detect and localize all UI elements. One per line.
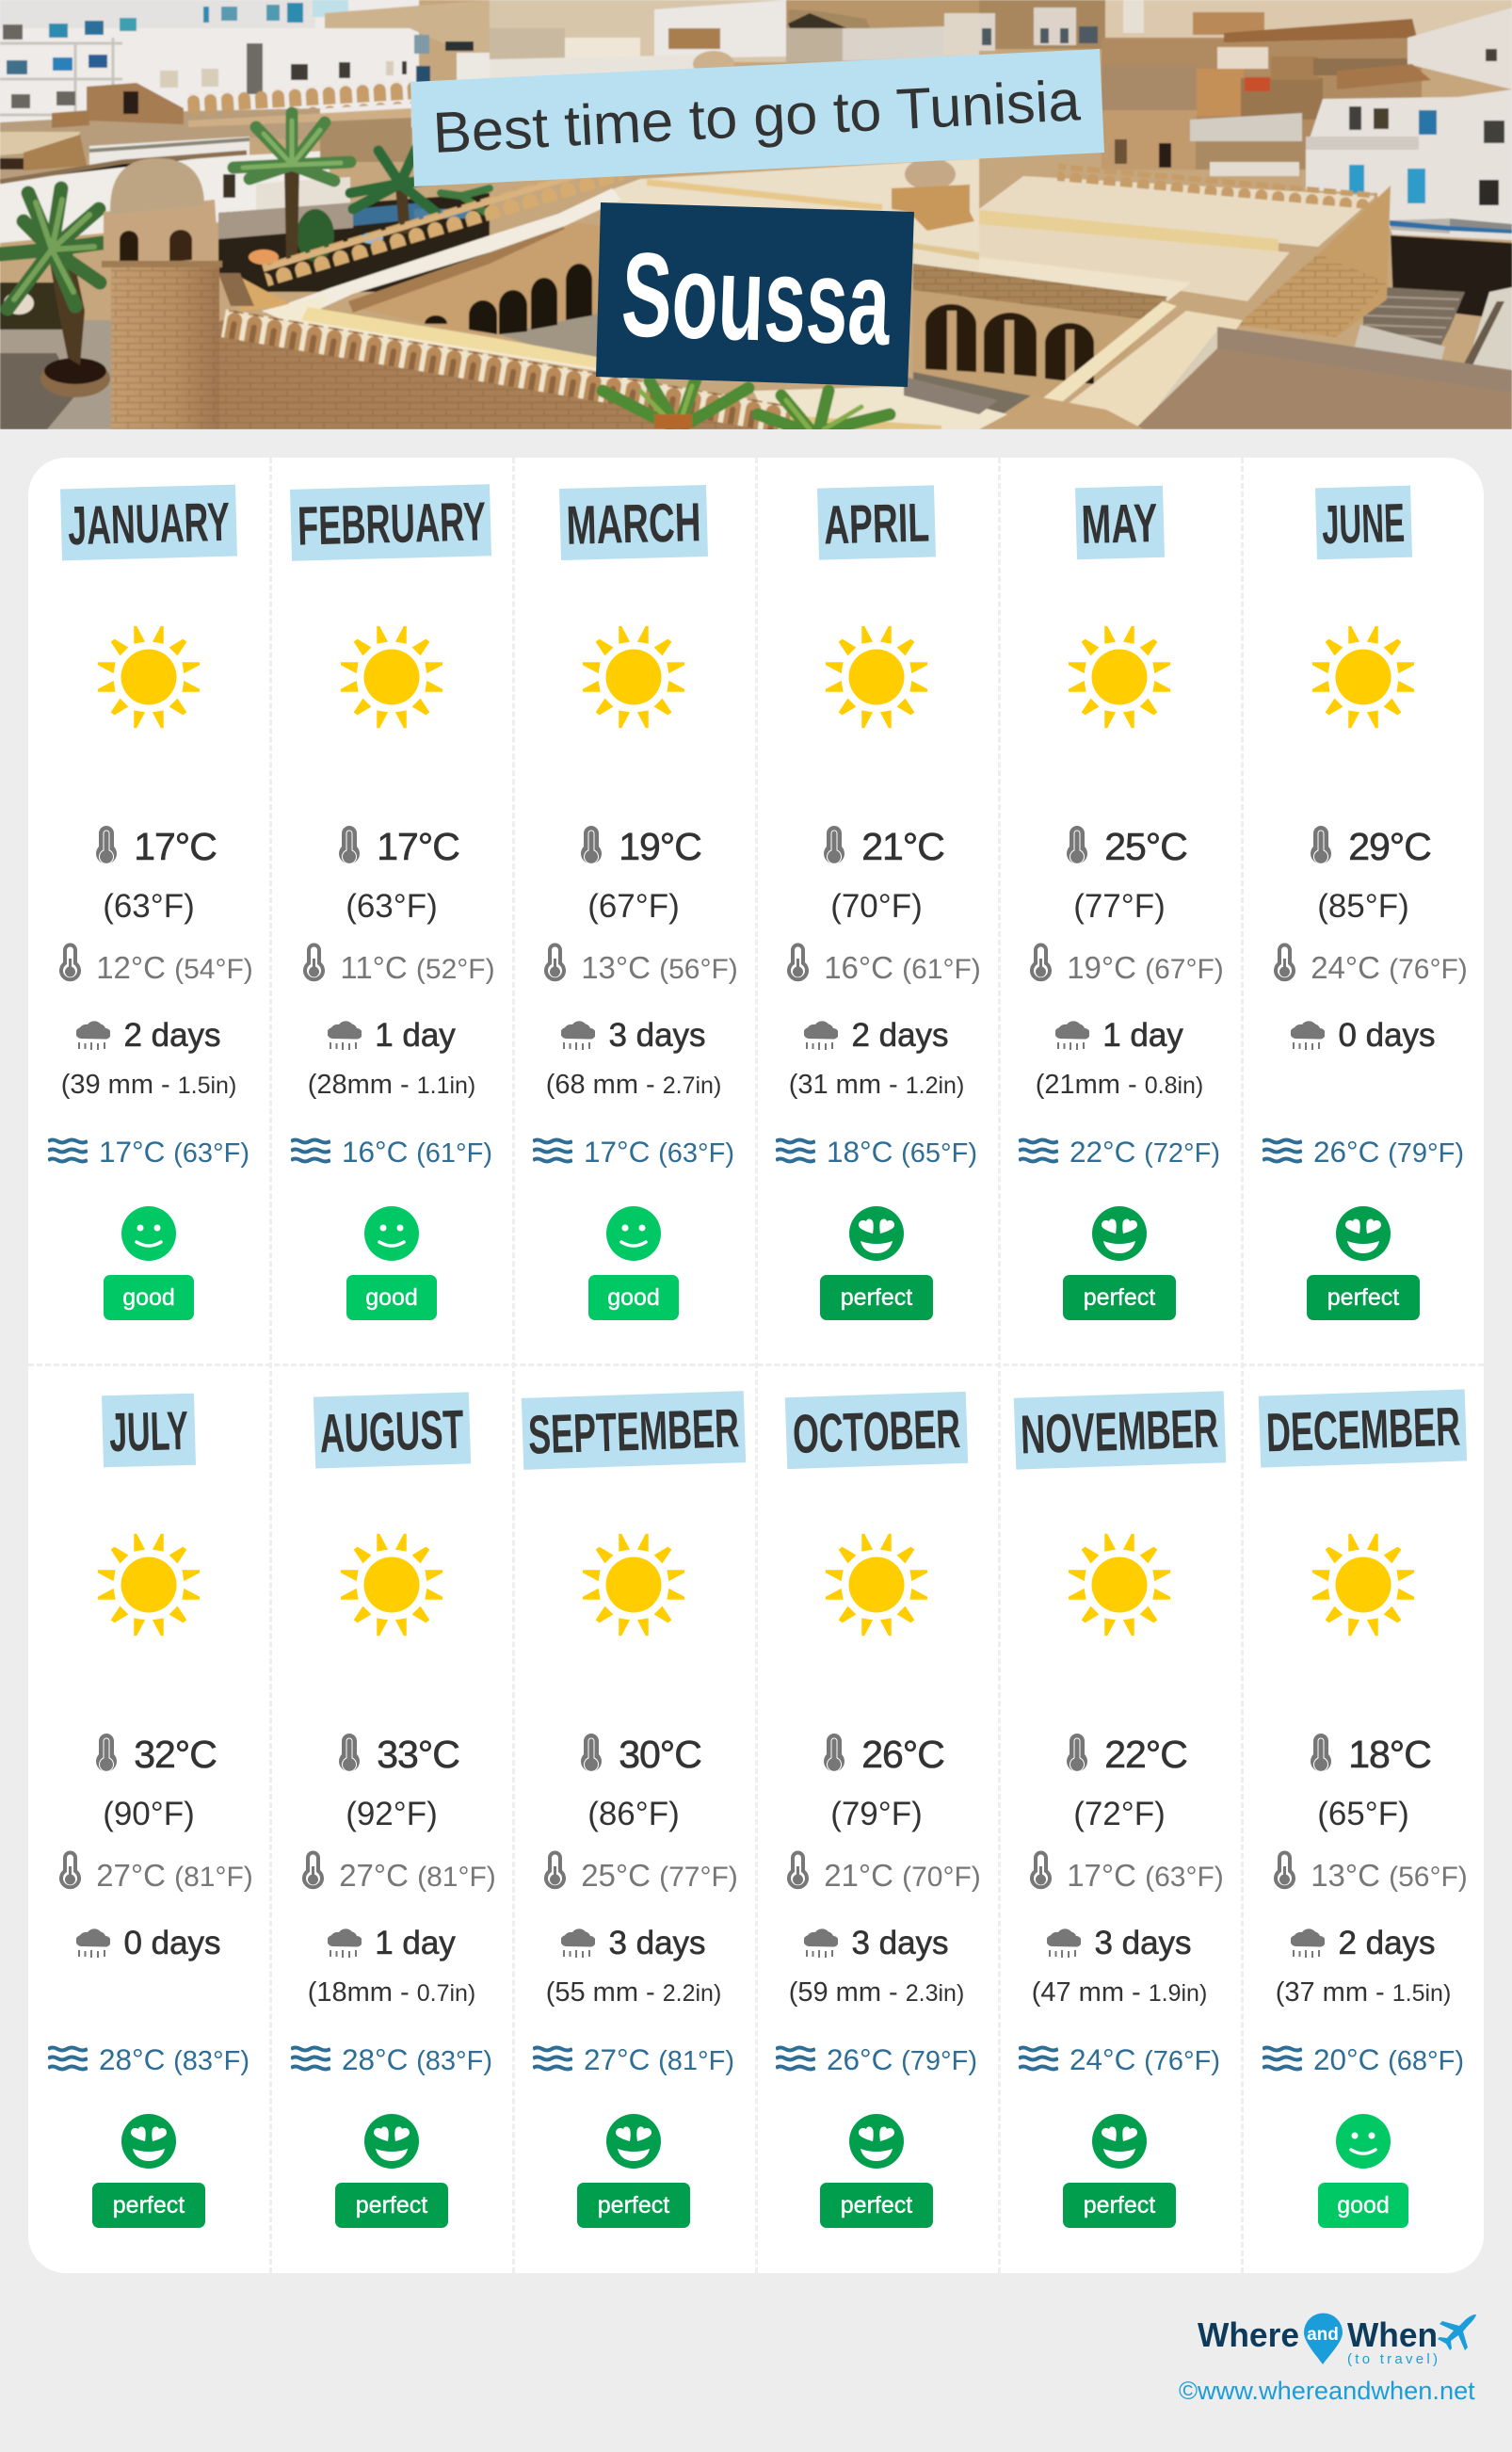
- icon: sun: [582, 625, 685, 729]
- rainy days: [755, 1920, 998, 1967]
- mosque roofs: [603, 158, 979, 282]
- month label: May: [998, 458, 1241, 561]
- icon: good smiley: [606, 1206, 661, 1261]
- lower wall: [113, 320, 781, 429]
- high temperature Fahrenheit: (70°F): [830, 888, 923, 925]
- rating badge: perfect: [1327, 1284, 1399, 1311]
- high temperature: [339, 825, 459, 868]
- month label: February: [290, 484, 491, 561]
- sea temperature: [27, 2036, 270, 2083]
- month label: June: [1242, 458, 1485, 561]
- high temperature: 29°C: [1348, 825, 1431, 868]
- rating badge: perfect: [1084, 1284, 1155, 1311]
- high temperature: 33°C: [377, 1733, 459, 1776]
- rating badge: perfect: [598, 2192, 669, 2218]
- low temperature: [755, 1852, 998, 1899]
- low temperature: [544, 944, 738, 985]
- high temperature Fahrenheit: (65°F): [1317, 1796, 1409, 1832]
- low temperature: 12°C (54°F): [96, 950, 253, 985]
- rating badge: perfect: [841, 1284, 912, 1311]
- light courtyard floor: [753, 386, 1007, 429]
- rainfall amount: (28mm - 1.1in): [308, 1070, 475, 1100]
- icon: perfect smiley: [1092, 2114, 1147, 2169]
- month label: November: [998, 1365, 1241, 1469]
- bottom right roof: [1217, 327, 1512, 394]
- high temperature: [512, 1731, 755, 1778]
- rainy days: 3 days: [851, 1925, 949, 1961]
- low temperature: [27, 1852, 270, 1899]
- sea temperature: 17°C (63°F): [99, 1135, 249, 1169]
- sea temperature: 27°C (81°F): [584, 2042, 734, 2076]
- logo: Where and When (to travel): When: [1347, 2315, 1438, 2354]
- month label: March: MARCH: [566, 492, 701, 557]
- sea temperature: 26°C (79°F): [1313, 1135, 1464, 1169]
- rainfall amount: (59 mm - 2.3in): [789, 1977, 964, 2008]
- rainy days: 0 days: [1338, 1017, 1436, 1054]
- arcade wall: [913, 266, 1167, 400]
- rainy days: 1 day: [375, 1017, 456, 1054]
- low temperature: [1242, 1852, 1485, 1899]
- rainy days: [76, 1017, 221, 1054]
- month label: June: JUNE: [1321, 492, 1406, 556]
- sea temperature: 16°C (61°F): [342, 1135, 492, 1169]
- rainy days: 2 days: [851, 1017, 949, 1054]
- rainy days: 3 days: [608, 1017, 706, 1054]
- subtitle banner: Best time to go to Tunisia: Best time to go to Tunisia: [431, 68, 1082, 165]
- rating badge: [346, 1275, 437, 1320]
- low temperature: 17°C (63°F): [1067, 1858, 1224, 1893]
- icon: sun: [578, 1529, 689, 1640]
- month label: November: NOVEMBER: [1020, 1398, 1219, 1465]
- rating badge: [1318, 2183, 1408, 2228]
- ground, planter and left palm: [0, 320, 111, 429]
- rainfall amount: (21mm - 0.8in): [1036, 1070, 1203, 1100]
- rainy days: [1242, 1920, 1485, 1967]
- rainy days: [328, 1017, 456, 1054]
- panel: October: [755, 1365, 998, 2273]
- rating badge: [1063, 2183, 1176, 2228]
- rainfall amount: (18mm - 0.7in): [308, 1977, 475, 2008]
- icon: sun: [821, 1529, 932, 1640]
- rating badge: [335, 2183, 448, 2228]
- high temperature: [998, 1731, 1241, 1778]
- icon: perfect smiley: [364, 2114, 419, 2169]
- rainfall amount: (31 mm - 1.2in): [789, 1070, 964, 1100]
- diagonal white walls right: [1040, 301, 1177, 407]
- logo: Where and When (to travel): (to travel): [1347, 2351, 1438, 2367]
- high temperature Fahrenheit: (63°F): [346, 888, 438, 925]
- month label: October: OCTOBER: [792, 1398, 961, 1465]
- icon: sun: [1308, 1529, 1419, 1640]
- low temperature: [270, 1852, 513, 1899]
- rainy days: [27, 1920, 270, 1967]
- rating badge: perfect: [356, 2192, 427, 2218]
- sea temperature: 28°C (83°F): [99, 2042, 249, 2076]
- top right town: [1105, 0, 1512, 38]
- rating badge: [577, 2183, 690, 2228]
- high temperature Fahrenheit: (72°F): [1073, 1796, 1166, 1832]
- rainy days: [998, 1920, 1241, 1967]
- corner minaret: [111, 264, 219, 429]
- month label: December: [1242, 1365, 1485, 1469]
- low temperature: [303, 944, 495, 985]
- icon: perfect smiley: [606, 2114, 661, 2169]
- upper merlon wall and white walkway: [262, 188, 621, 313]
- icon: perfect smiley: [849, 1206, 904, 1261]
- high temperature Fahrenheit: (92°F): [346, 1796, 438, 1832]
- panel: September: [512, 1365, 755, 2273]
- rainy days: [804, 1017, 949, 1054]
- rating badge: perfect: [1084, 2192, 1155, 2218]
- icon: good smiley: [1336, 2114, 1391, 2169]
- icon: sun: [825, 625, 928, 729]
- rating badge: good: [607, 1284, 660, 1311]
- rainfall amount: (39 mm - 1.5in): [61, 1070, 236, 1100]
- low temperature: 11°C (52°F): [340, 950, 495, 985]
- high temperature: [581, 825, 701, 868]
- logo: Where and When (to travel): and: [1307, 2325, 1339, 2345]
- month label: October: [755, 1365, 998, 1469]
- hero photo: Great Mosque of Sousse and rooftops: [0, 0, 1512, 429]
- panel: March: [533, 485, 738, 1320]
- rainfall amount: (47 mm - 1.9in): [1032, 1977, 1207, 2008]
- rating badge: [588, 1275, 679, 1320]
- month label: September: [512, 1365, 755, 1469]
- high temperature: 22°C: [1104, 1733, 1187, 1776]
- left middle rooftops: [0, 108, 320, 184]
- panel: May: [1019, 486, 1224, 1320]
- rainy days: [1242, 1012, 1485, 1059]
- sea temperature: 28°C (83°F): [342, 2042, 492, 2076]
- high temperature Fahrenheit: (79°F): [830, 1796, 923, 1832]
- rainy days: 1 day: [375, 1925, 456, 1961]
- rainy days: 2 days: [123, 1017, 221, 1054]
- icon: good smiley: [364, 1206, 419, 1261]
- month label: August: AUGUST: [319, 1399, 465, 1464]
- high temperature: 19°C: [619, 825, 701, 868]
- rainy days: 3 days: [608, 1925, 706, 1961]
- high temperature: 30°C: [619, 1733, 701, 1776]
- low temperature: 19°C (67°F): [1067, 950, 1224, 985]
- high temperature Fahrenheit: (67°F): [587, 888, 680, 925]
- rating badge: [820, 1275, 933, 1320]
- sea temperature: 24°C (76°F): [1070, 2042, 1220, 2076]
- rating badge: good: [122, 1284, 175, 1311]
- low temperature: 13°C (56°F): [1311, 1858, 1468, 1893]
- month label: April: APRIL: [823, 492, 930, 556]
- icon: perfect smiley: [1092, 1206, 1147, 1261]
- low temperature: 27°C (81°F): [96, 1858, 253, 1893]
- title banner: Soussa: [596, 202, 914, 387]
- icon: sun: [341, 625, 442, 729]
- sea temperature: 22°C (72°F): [1070, 1135, 1220, 1169]
- high temperature Fahrenheit: (77°F): [1073, 888, 1166, 925]
- panel: December: [1242, 1365, 1485, 2273]
- rating badge: [820, 2183, 933, 2228]
- rainy days: [998, 1012, 1241, 1059]
- courtyard left wall: [348, 221, 603, 337]
- rating badge: perfect: [841, 2192, 912, 2218]
- icon: sun: [1064, 1529, 1175, 1640]
- month label: July: JULY: [108, 1400, 189, 1463]
- website credit: ©www.whereandwhen.net: [1179, 2376, 1475, 2405]
- icon: good smiley: [121, 1206, 176, 1261]
- high temperature: [755, 1731, 998, 1778]
- month label: January: JANUARY: [67, 492, 231, 557]
- rainy days: 3 days: [1094, 1925, 1192, 1961]
- month label: July: [27, 1365, 270, 1469]
- middle palms: [284, 168, 299, 262]
- low temperature: 27°C (81°F): [339, 1858, 496, 1893]
- icon: perfect smiley: [121, 2114, 176, 2169]
- panel: February: [290, 484, 495, 1320]
- crenellated wall behind: [320, 111, 411, 162]
- month label: January: [60, 484, 237, 561]
- high temperature: 25°C: [1104, 825, 1187, 868]
- high temperature Fahrenheit: (85°F): [1317, 888, 1409, 925]
- sea temperature: [1242, 1128, 1485, 1175]
- high temperature: 17°C: [134, 825, 217, 868]
- rating badge: perfect: [113, 2192, 185, 2218]
- panel: monthly climate card: [28, 458, 1484, 2273]
- rainy days: 0 days: [123, 1925, 221, 1961]
- low temperature: [512, 1852, 755, 1899]
- logo: Where and When (to travel): Where: [1198, 2315, 1299, 2354]
- high temperature: [1242, 1731, 1485, 1778]
- high temperature: 21°C: [861, 825, 944, 868]
- high temperature: [96, 825, 217, 868]
- high temperature Fahrenheit: (63°F): [103, 888, 195, 925]
- panel: April: [776, 485, 981, 1320]
- rainy days: [561, 1017, 706, 1054]
- top center rooftops: [490, 0, 791, 62]
- high temperature: 17°C: [377, 825, 459, 868]
- month label: May: MAY: [1081, 492, 1158, 556]
- rating badge: good: [365, 1284, 418, 1311]
- sea temperature: [270, 2036, 513, 2083]
- rating badge: [1063, 1275, 1176, 1320]
- month label: March: [559, 485, 708, 560]
- low temperature: [998, 1852, 1241, 1899]
- icon: sun: [336, 1529, 447, 1640]
- rainy days: [512, 1920, 755, 1967]
- rating badge: [1307, 1275, 1420, 1320]
- low temperature: 13°C (56°F): [581, 950, 738, 985]
- low temperature: [1242, 944, 1485, 992]
- month label: August: [270, 1365, 513, 1469]
- subtitle banner: Best time to go to Tunisia: [410, 49, 1104, 186]
- panel: June: [1242, 458, 1485, 1365]
- high temperature Fahrenheit: (86°F): [587, 1796, 680, 1832]
- rating badge: [92, 2183, 205, 2228]
- right white buildings: [1407, 8, 1512, 89]
- rating badge: good: [1337, 2192, 1390, 2218]
- panel: January: [48, 484, 253, 1320]
- icon: sun: [98, 625, 200, 729]
- high temperature: [824, 825, 944, 868]
- sea temperature: [755, 2036, 998, 2083]
- high temperature: [1242, 823, 1485, 870]
- sea temperature: [998, 2036, 1241, 2083]
- top-left white apartments: [0, 0, 419, 127]
- month label: September: SEPTEMBER: [527, 1397, 740, 1466]
- upper minaret: [905, 158, 956, 190]
- sea temperature: 26°C (79°F): [827, 2042, 977, 2076]
- bottom palms: [603, 377, 890, 429]
- low temperature: 24°C (76°F): [1311, 950, 1468, 985]
- rainfall amount: (37 mm - 1.5in): [1276, 1977, 1451, 2008]
- high temperature: [27, 1731, 270, 1778]
- low temperature: 16°C (61°F): [824, 950, 981, 985]
- high temperature: 26°C: [861, 1733, 944, 1776]
- sea temperature: [512, 2036, 755, 2083]
- high temperature: 32°C: [134, 1733, 217, 1776]
- sea temperature: 17°C (63°F): [584, 1135, 734, 1169]
- sea temperature: 18°C (65°F): [827, 1135, 977, 1169]
- rainy days: [270, 1920, 513, 1967]
- high temperature: [270, 1731, 513, 1778]
- mosque right wall: [1237, 186, 1391, 337]
- rainy days: 2 days: [1338, 1925, 1436, 1961]
- icon: sun: [1308, 621, 1419, 733]
- low temperature: [787, 944, 981, 985]
- month label: February: FEBRUARY: [297, 491, 487, 557]
- sea temperature: [998, 1128, 1241, 1175]
- high temperature: 18°C: [1348, 1733, 1431, 1776]
- icon: perfect smiley: [849, 2114, 904, 2169]
- low temperature: [59, 944, 253, 985]
- sea temperature: [1242, 2036, 1485, 2083]
- panel: November: [998, 1365, 1241, 2273]
- low temperature: 25°C (77°F): [581, 1858, 738, 1893]
- high temperature: [998, 823, 1241, 870]
- rainfall amount: (55 mm - 2.2in): [546, 1977, 721, 2008]
- market, stairs, right ground: [1391, 235, 1512, 320]
- sea temperature: 20°C (68°F): [1313, 2042, 1464, 2076]
- panel: August: [270, 1365, 513, 2273]
- panel: July: [27, 1365, 270, 2273]
- low temperature: 21°C (70°F): [824, 1858, 981, 1893]
- rating badge: [104, 1275, 194, 1320]
- rainy days: 1 day: [1102, 1017, 1183, 1054]
- rainfall amount: (68 mm - 2.7in): [546, 1070, 721, 1100]
- icon: perfect smiley: [1336, 1206, 1391, 1261]
- high temperature Fahrenheit: (90°F): [103, 1796, 195, 1832]
- dark plaza with awnings: [218, 193, 490, 292]
- icon: sun: [93, 1529, 204, 1640]
- title banner: Soussa: Soussa: [619, 227, 893, 370]
- icon: sun: [1064, 621, 1175, 733]
- low temperature: [998, 944, 1241, 992]
- month label: April: [817, 485, 936, 560]
